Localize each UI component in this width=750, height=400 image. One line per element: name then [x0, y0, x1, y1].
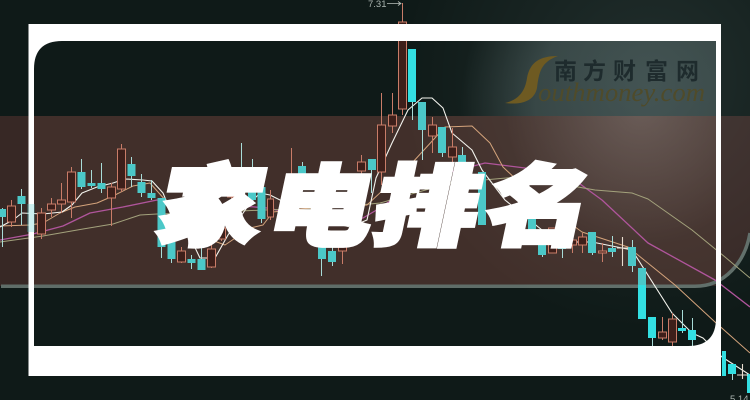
icon: logo swoosh: [505, 56, 558, 104]
red candle bodies: [8, 22, 676, 342]
cyan candle bodies: [0, 102, 646, 285]
band lower edge: [1, 233, 750, 286]
peak price label: [368, 0, 401, 10]
logo chinese name: 南方财富网: [554, 58, 699, 84]
inner panel tint: [34, 116, 716, 286]
top panel glow: [34, 41, 716, 116]
red candle wicks: [12, 3, 672, 347]
band glow: [34, 116, 716, 286]
bright cyan candle bodies: [408, 49, 750, 393]
price band: [0, 116, 750, 286]
logo domain: outhmoney.com: [538, 78, 705, 107]
doji candles: [617, 237, 748, 379]
moving average lines: [0, 98, 750, 375]
watermark logo: [505, 56, 705, 107]
title: 家电排名: [149, 159, 602, 257]
candle seen through frame: [27, 204, 35, 232]
